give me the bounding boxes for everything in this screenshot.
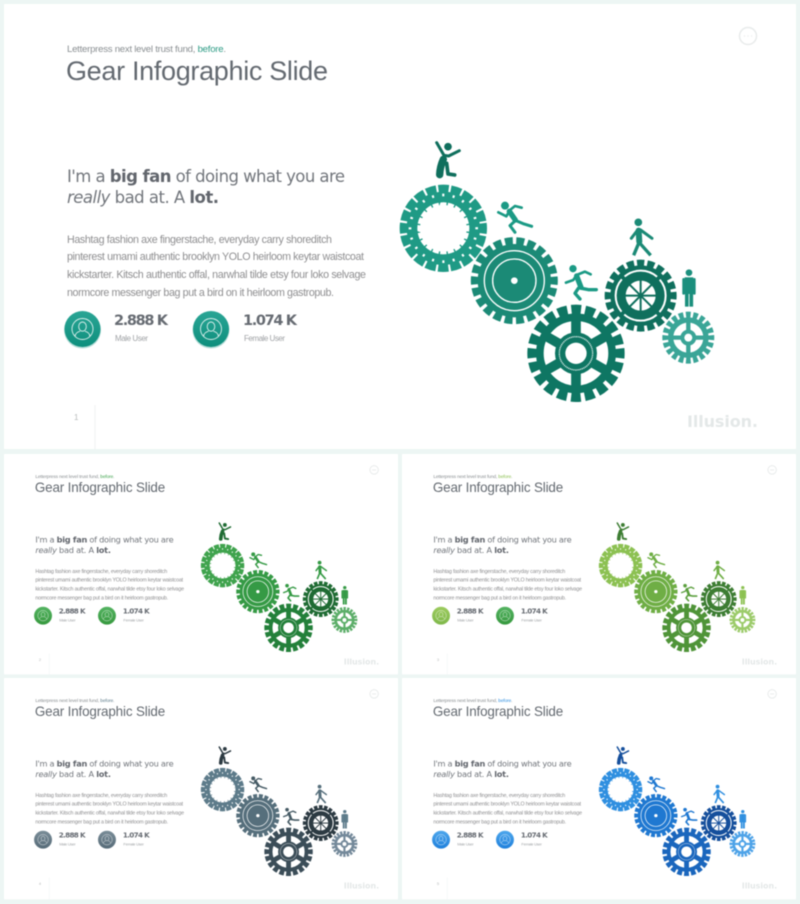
body paragraph [433, 793, 582, 825]
gear 2 [471, 238, 557, 324]
stat: male user [432, 607, 484, 625]
figure: walker [714, 785, 724, 803]
figure: runner [498, 202, 532, 232]
kicker text: Letterpress next level trust fund, before. [67, 44, 226, 55]
gear 1 [599, 768, 642, 812]
stat: male user: Male User [59, 618, 76, 623]
gear illustration [201, 747, 357, 876]
figure: standing person [740, 586, 745, 605]
headline: I'm a big fan of doing what you are [35, 535, 174, 545]
gear 1 [399, 184, 487, 272]
body paragraph: normcore messenger bag put a bird on it heirloom gastropub. [433, 595, 566, 601]
body paragraph: kickstarter. Kitsch authentic offal, narwhal tilde etsy four loko selvage [67, 269, 366, 281]
headline [67, 167, 345, 207]
stat: male user: Male User [457, 618, 474, 623]
gear illustration [599, 523, 755, 652]
figure: runner [648, 552, 664, 568]
stat: male user: Male User [457, 842, 474, 847]
gear 5 [663, 313, 713, 363]
panel: slate variant [4, 678, 398, 899]
figure: walker [714, 561, 724, 579]
headline: really bad at. A lot. [35, 545, 111, 555]
headline: I'm a big fan of doing what you are [433, 759, 572, 769]
kicker text: Letterpress next level trust fund, before. [35, 698, 114, 704]
gear 1 [201, 768, 244, 812]
figure: standing person [342, 810, 347, 829]
page number: 2 [39, 657, 41, 662]
figure: jumping person [219, 747, 231, 763]
figure: standing person [342, 586, 347, 605]
gear 2 [634, 794, 677, 837]
headline [35, 759, 174, 779]
stat: female user [496, 831, 548, 849]
gear 2 [236, 794, 279, 837]
stat: female user: 1.074 K [521, 607, 548, 616]
gear 2 [634, 570, 677, 613]
panel: main slide teal [4, 4, 796, 449]
body paragraph: normcore messenger bag put a bird on it heirloom gastropub. [35, 819, 168, 825]
stat: male user [34, 831, 86, 849]
stat: female user: Female User [521, 618, 542, 623]
figure: jumping person [219, 523, 231, 539]
stat: male user: 2.888 K [59, 607, 86, 616]
panel: green variant [4, 454, 398, 674]
body paragraph: Hashtag fashion axe fingerstache, everyday carry shoreditch [433, 569, 565, 575]
stat: female user: Female User [123, 618, 144, 623]
gear illustration [599, 747, 755, 876]
gear 5 [332, 608, 357, 632]
stat: female user: 1.074 K [123, 831, 150, 840]
gear 4 [701, 805, 737, 841]
gear illustration [399, 143, 713, 402]
gear 2 [236, 570, 279, 613]
panel: blue variant [402, 678, 796, 899]
gear 3 [528, 305, 624, 402]
body paragraph: kickstarter. Kitsch authentic offal, narwhal tilde etsy four loko selvage [35, 586, 184, 592]
gear 5 [730, 608, 755, 632]
menu icon small [768, 466, 776, 474]
gear 4 [605, 260, 677, 332]
body paragraph [433, 569, 582, 601]
body paragraph: Hashtag fashion axe fingerstache, everyday carry shoreditch [433, 793, 565, 799]
menu icon small [370, 690, 378, 698]
figure: jumping person [437, 143, 459, 175]
figure: second runner [682, 808, 697, 825]
headline [433, 535, 572, 555]
figure: second runner [284, 808, 299, 825]
stat: male user: Male User [115, 334, 148, 343]
gear 5 [730, 832, 755, 856]
body paragraph: pinterest umami authentic brooklyn YOLO heirloom keytar waistcoat [433, 801, 582, 807]
figure: standing person [684, 269, 694, 307]
stat: female user: Female User [521, 842, 542, 847]
gear 4 [303, 805, 339, 841]
body paragraph: Hashtag fashion axe fingerstache, everyday carry shoreditch [35, 569, 167, 575]
headline: I'm a big fan of doing what you are [433, 535, 572, 545]
page number: 1 [74, 413, 79, 422]
kicker text: Letterpress next level trust fund, before. [433, 698, 512, 704]
body paragraph: normcore messenger bag put a bird on it heirloom gastropub. [35, 595, 168, 601]
headline: I'm a big fan of doing what you are [35, 759, 174, 769]
brand mark: Illusion. [687, 412, 758, 431]
headline: really bad at. A lot. [433, 545, 509, 555]
figure: walker [631, 218, 652, 255]
stat: female user: Female User [123, 842, 144, 847]
gear 5 [332, 832, 357, 856]
gear 1 [599, 544, 642, 588]
stat: male user [432, 831, 484, 849]
kicker text: Letterpress next level trust fund, before. [35, 474, 114, 480]
body paragraph: normcore messenger bag put a bird on it heirloom gastropub. [67, 287, 334, 299]
title: Gear Infographic Slide [35, 480, 165, 495]
title: Gear Infographic Slide [433, 480, 563, 495]
brand mark: Illusion. [344, 657, 379, 666]
page number: 3 [437, 657, 440, 662]
page number: 5 [437, 881, 440, 886]
stat: male user: 2.888 K [457, 831, 484, 840]
headline [433, 759, 572, 779]
body paragraph: Hashtag fashion axe fingerstache, everyday carry shoreditch [67, 234, 332, 246]
body paragraph [35, 569, 184, 601]
menu icon [740, 28, 756, 44]
body paragraph: pinterest umami authentic brooklyn YOLO heirloom keytar waistcoat [433, 577, 582, 583]
stat: male user: Male User [59, 842, 76, 847]
figure: jumping person [617, 747, 629, 763]
body paragraph: kickstarter. Kitsch authentic offal, narwhal tilde etsy four loko selvage [35, 810, 184, 816]
headline: I'm a big fan of doing what you are [67, 167, 345, 186]
title: Gear Infographic Slide [433, 704, 563, 719]
gear 3 [265, 828, 313, 876]
gear 4 [701, 581, 737, 617]
stat: female user: Female User [244, 334, 285, 343]
figure: walker [316, 561, 326, 579]
stat: male user: 2.888 K [59, 831, 86, 840]
kicker text: Letterpress next level trust fund, before. [433, 474, 512, 480]
gear 1 [201, 544, 244, 588]
figure: runner [250, 776, 266, 792]
menu icon small [370, 466, 378, 474]
headline: really bad at. A lot. [35, 769, 111, 779]
stat: female user [98, 607, 150, 625]
title: Gear Infographic Slide [66, 56, 328, 86]
headline: really bad at. A lot. [67, 188, 219, 207]
title: Gear Infographic Slide [35, 704, 165, 719]
body paragraph: Hashtag fashion axe fingerstache, everyday carry shoreditch [35, 793, 167, 799]
brand mark: Illusion. [344, 881, 379, 890]
body paragraph: pinterest umami authentic brooklyn YOLO heirloom keytar waistcoat [35, 577, 184, 583]
body paragraph: kickstarter. Kitsch authentic offal, narwhal tilde etsy four loko selvage [433, 810, 582, 816]
body paragraph: normcore messenger bag put a bird on it heirloom gastropub. [433, 819, 566, 825]
body paragraph: kickstarter. Kitsch authentic offal, narwhal tilde etsy four loko selvage [433, 586, 582, 592]
gear 4 [303, 581, 339, 617]
headline [35, 535, 174, 555]
figure: runner [250, 552, 266, 568]
stat: male user [34, 607, 86, 625]
stat: female user [496, 607, 548, 625]
brand mark: Illusion. [742, 657, 777, 666]
gear 3 [265, 604, 313, 652]
figure: jumping person [617, 523, 629, 539]
page number: 4 [39, 881, 42, 886]
figure: second runner [284, 584, 299, 601]
body paragraph: pinterest umami authentic brooklyn YOLO heirloom keytar waistcoat [67, 251, 364, 263]
stat: male user: 2.888 K [457, 607, 484, 616]
stat: female user [98, 831, 150, 849]
stat: female user: 1.074 K [243, 313, 298, 329]
panel: lime variant [402, 454, 796, 674]
figure: second runner [566, 265, 596, 299]
figure: second runner [682, 584, 697, 601]
body paragraph: pinterest umami authentic brooklyn YOLO heirloom keytar waistcoat [35, 801, 184, 807]
stat: female user: 1.074 K [123, 607, 150, 616]
stat: female user: 1.074 K [521, 831, 548, 840]
brand mark: Illusion. [742, 881, 777, 890]
figure: standing person [740, 810, 745, 829]
stat: female user [192, 311, 298, 348]
body paragraph [67, 234, 366, 299]
stat: male user: 2.888 K [114, 313, 169, 329]
stat: male user [64, 311, 169, 348]
figure: runner [648, 776, 664, 792]
headline: really bad at. A lot. [433, 769, 509, 779]
gear illustration [201, 523, 357, 652]
gear 3 [663, 828, 711, 876]
body paragraph [35, 793, 184, 825]
figure: walker [316, 785, 326, 803]
gear 3 [663, 604, 711, 652]
menu icon small [768, 690, 776, 698]
